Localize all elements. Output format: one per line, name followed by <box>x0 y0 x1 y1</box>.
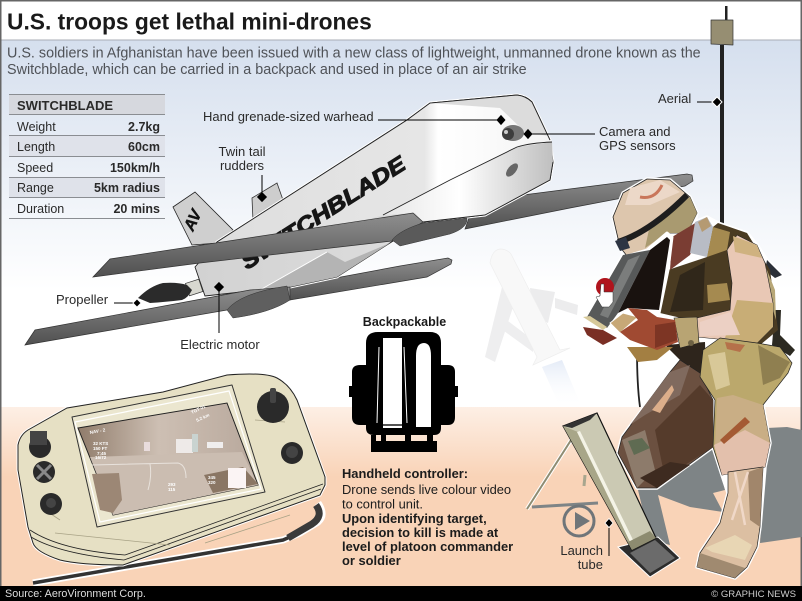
soldier front thigh <box>700 338 792 475</box>
controller screen: NAV - 2 <box>89 427 106 435</box>
controller screen: 115 <box>168 487 176 492</box>
tail fin with AV mark <box>173 192 233 245</box>
lower nose panel <box>383 142 553 222</box>
soldier boot <box>697 467 763 578</box>
panel: backpack icon <box>349 315 458 452</box>
soldier display hood <box>587 233 672 328</box>
controller screen: 150 FT <box>93 446 108 451</box>
illustration: launched ghost drone <box>485 249 580 407</box>
footer bar <box>0 586 802 601</box>
footer bar: Source: AeroVironment Corp. <box>5 588 146 600</box>
controller screen: 7:45 <box>97 451 107 456</box>
controller screen: 16/72 <box>95 455 107 460</box>
panel: specification table: 60cm <box>128 140 160 154</box>
intro text block: U.S. soldiers in Afghanistan have been issued with a new class of lightweight, unmanned drone known as the <box>7 46 701 62</box>
controller cable <box>33 503 322 583</box>
illustration: soldier <box>583 6 795 578</box>
rear wing pivot disc <box>227 286 290 318</box>
controller screen: 345 <box>208 475 216 480</box>
controller screen <box>78 403 258 515</box>
front wing right half <box>465 174 693 229</box>
panel: specification table: 150km/h <box>110 161 160 175</box>
title: U.S. troops get lethal mini-drones <box>7 8 372 34</box>
soldier rear thigh <box>618 360 713 488</box>
footer bar: © GRAPHIC NEWS <box>711 589 796 600</box>
soldier neck and collar <box>670 217 713 270</box>
callout labels: Hand grenade-sized warhead <box>203 109 374 124</box>
soldier hands and controller <box>583 308 678 350</box>
rear wing right half <box>287 258 452 300</box>
soldier waist shadow <box>665 342 706 378</box>
handheld controller caption: or soldier <box>342 553 401 568</box>
panel: specification table: Range <box>17 181 54 195</box>
tail fin with AV mark: AV <box>181 206 206 235</box>
handheld controller caption: decision to kill is made at <box>342 525 499 540</box>
controller joystick <box>257 388 289 423</box>
controller screen: TGT 01 <box>190 404 207 415</box>
callout labels: Propeller <box>56 292 109 307</box>
front wing left half <box>93 213 423 277</box>
play icon <box>564 506 594 536</box>
callout labels: Camera and <box>599 124 671 139</box>
rear wing left half <box>25 287 290 345</box>
intro text block: Switchblade, which can be carried in a backpack and used in place of an air strike <box>7 62 527 78</box>
soldier arm <box>674 235 773 348</box>
callout labels: GPS sensors <box>599 138 676 153</box>
launch tube barrel <box>563 413 656 550</box>
launch tube leg <box>527 437 573 509</box>
panel: specification table: Duration <box>17 202 64 216</box>
icon: handheld controller unit <box>18 374 325 583</box>
panel: specification table <box>9 94 165 218</box>
panel: specification table: SWITCHBLADE <box>17 98 113 113</box>
handheld controller caption: level of platoon commander <box>342 539 513 554</box>
controller screen: 32 KTS <box>93 441 108 446</box>
handheld controller caption: Handheld controller: <box>342 466 468 481</box>
twin tail rudder <box>252 183 283 221</box>
controller screen: 320 <box>208 480 216 485</box>
soldier silhouette outline <box>583 179 795 578</box>
callout labels: tube <box>578 557 603 572</box>
launch tube base plate <box>618 537 680 577</box>
red touch button icon <box>596 278 614 307</box>
front wing pivot disc <box>392 218 467 246</box>
panel: specification table: Length <box>17 140 55 154</box>
controller screen: 5.2 km <box>195 412 210 423</box>
illustration: Switchblade drone <box>25 95 693 345</box>
upper surface <box>217 95 552 250</box>
handheld controller caption: Upon identifying target, <box>342 511 487 526</box>
drone body <box>195 95 553 296</box>
panel: specification table: 2.7kg <box>128 120 160 134</box>
callout labels: Twin tail <box>219 144 266 159</box>
callout labels <box>56 91 691 572</box>
soldier pack strap <box>765 260 782 278</box>
controller buttons <box>29 431 303 515</box>
label leader lines and markers <box>114 97 722 556</box>
panel: specification table: Weight <box>17 120 56 134</box>
callout labels: rudders <box>220 158 265 173</box>
soldier lap pouch <box>627 347 673 362</box>
aerial antenna <box>711 6 733 230</box>
controller body <box>18 374 325 565</box>
illustration: soldier ground shadow <box>638 427 802 545</box>
panel: specification table: Speed <box>17 161 53 175</box>
heading: Backpackable: Backpackable <box>363 315 446 329</box>
camera lens <box>502 125 524 141</box>
handheld controller caption: Drone sends live colour video <box>342 482 511 497</box>
soldier wire <box>637 350 640 407</box>
panel: specification table: 5km radius <box>94 181 160 195</box>
handheld controller caption: to control unit. <box>342 496 423 512</box>
controller bezel <box>72 385 265 527</box>
callout labels: Launch <box>560 543 603 558</box>
panel: specification table: 20 mins <box>113 202 160 216</box>
callout labels: Aerial <box>658 91 691 106</box>
soldier vest <box>660 223 778 345</box>
soldier helmet <box>613 179 697 256</box>
propeller <box>138 279 203 303</box>
callout labels: Electric motor <box>180 337 260 352</box>
drone name lettering: SWITCHBLADE <box>237 151 411 274</box>
controller screen: 293 <box>168 482 176 487</box>
illustration: launch tube <box>527 413 680 577</box>
